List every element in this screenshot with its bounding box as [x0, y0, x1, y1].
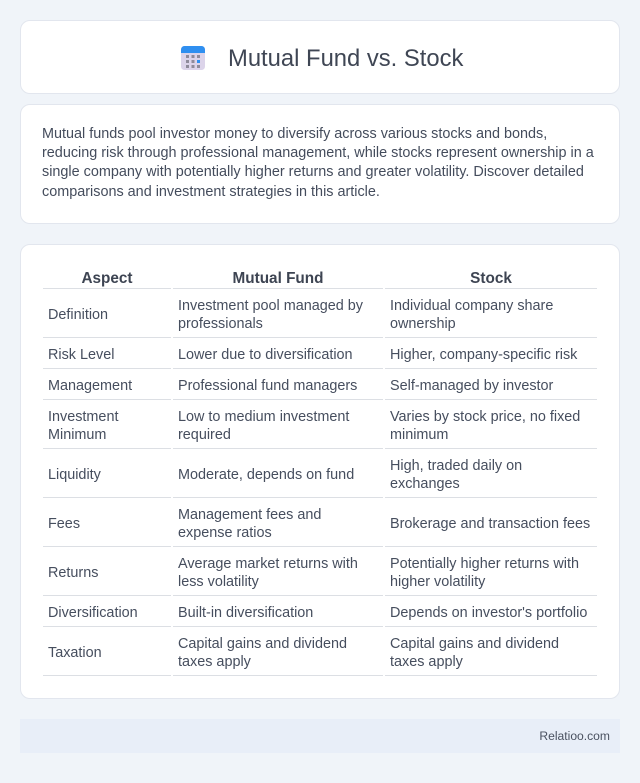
intro text: Mutual funds pool investor money to diversify across various stocks and bonds,: [42, 126, 547, 142]
comparison table: Taxation: [48, 645, 102, 661]
comparison table: Individual company share: [390, 298, 553, 314]
footer: [20, 719, 620, 753]
comparison table: Built-in diversification: [178, 605, 313, 621]
comparison table: Average market returns with: [178, 556, 358, 572]
comparison table: Self-managed by investor: [390, 378, 553, 394]
panel: comparison table: [20, 244, 620, 699]
comparison table: less volatility: [178, 574, 259, 590]
comparison table: Capital gains and dividend: [178, 636, 347, 652]
comparison table: professionals: [178, 316, 263, 332]
comparison table: Varies by stock price, no fixed: [390, 409, 580, 425]
comparison table: Lower due to diversification: [178, 347, 353, 363]
panel: header: [20, 20, 620, 94]
comparison table: Professional fund managers: [178, 378, 357, 394]
comparison table: higher volatility: [390, 574, 485, 590]
comparison table: taxes apply: [178, 654, 251, 670]
comparison table: taxes apply: [390, 654, 463, 670]
comparison table: required: [178, 427, 231, 443]
comparison table: Potentially higher returns with: [390, 556, 579, 572]
comparison table: Definition: [48, 307, 108, 323]
comparison table: Brokerage and transaction fees: [390, 516, 590, 532]
comparison table: Fees: [48, 516, 80, 532]
panel: introduction: [20, 104, 620, 224]
comparison table: Risk Level: [48, 347, 114, 363]
comparison table: minimum: [390, 427, 448, 443]
comparison table: Mutual Fund: [233, 270, 323, 287]
comparison table: Investment: [48, 409, 118, 425]
comparison table: Management fees and: [178, 507, 321, 523]
comparison table: Moderate, depends on fund: [178, 467, 354, 483]
comparison table: Higher, company-specific risk: [390, 347, 577, 363]
comparison table: Depends on investor's portfolio: [390, 605, 587, 621]
intro text: comparisons and investment strategies in this article.: [42, 184, 380, 200]
comparison table: ownership: [390, 316, 456, 332]
comparison table: Low to medium investment: [178, 409, 349, 425]
comparison table: exchanges: [390, 476, 460, 492]
comparison table: Returns: [48, 565, 98, 581]
intro text: single company with potentially higher returns and greater volatility. Discover detailed: [42, 164, 584, 180]
intro text: reducing risk through professional management, while stocks represent ownership in a: [42, 145, 594, 161]
comparison table: expense ratios: [178, 525, 272, 541]
intro text: [42, 126, 594, 200]
comparison table: Aspect: [81, 270, 132, 287]
footer: Relatioo.com: [539, 729, 610, 743]
comparison table: Diversification: [48, 605, 138, 621]
icon: calendar: [181, 46, 205, 70]
comparison table: Investment pool managed by: [178, 298, 363, 314]
comparison table: Minimum: [48, 427, 106, 443]
comparison table: Capital gains and dividend: [390, 636, 559, 652]
comparison table: Management: [48, 378, 132, 394]
title: Mutual Fund vs. Stock: [228, 45, 463, 72]
comparison table: High, traded daily on: [390, 458, 522, 474]
comparison table: Stock: [470, 270, 512, 287]
comparison table: [43, 270, 597, 676]
comparison table: Liquidity: [48, 467, 101, 483]
